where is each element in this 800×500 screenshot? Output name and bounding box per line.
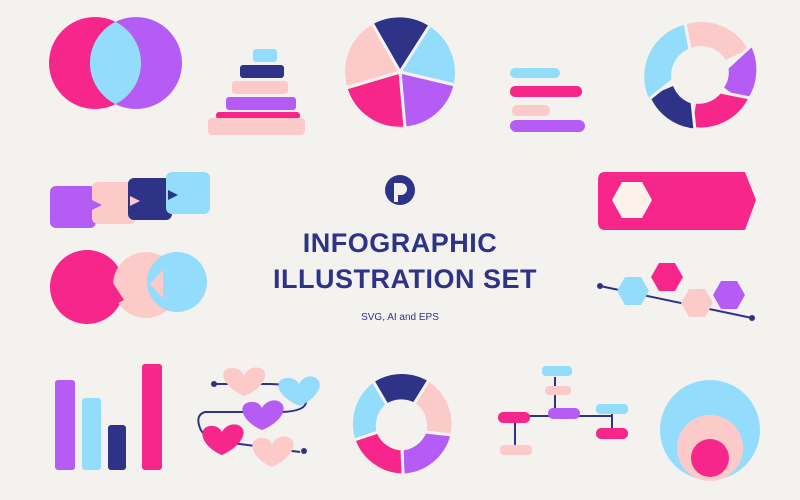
segmented donut [351,372,453,475]
title: ILLUSTRATION SET [273,264,537,294]
concentric circles [660,380,760,481]
logo [385,175,415,205]
horizontal bars [510,68,585,132]
cycle donut arrows [643,21,758,130]
subtitle: SVG, AI and EPS [361,312,439,323]
puzzle connected blocks [50,172,210,228]
pie chart [344,16,456,128]
pyramid stack [208,49,305,135]
hexagon banner [598,172,756,230]
hexagon timeline [597,263,755,321]
title: INFOGRAPHIC [303,228,497,258]
speech bubbles [50,250,207,324]
venn diagram [49,17,182,109]
hearts path [198,367,320,467]
title [273,228,537,294]
org chart [498,366,628,455]
bar chart [55,364,162,470]
